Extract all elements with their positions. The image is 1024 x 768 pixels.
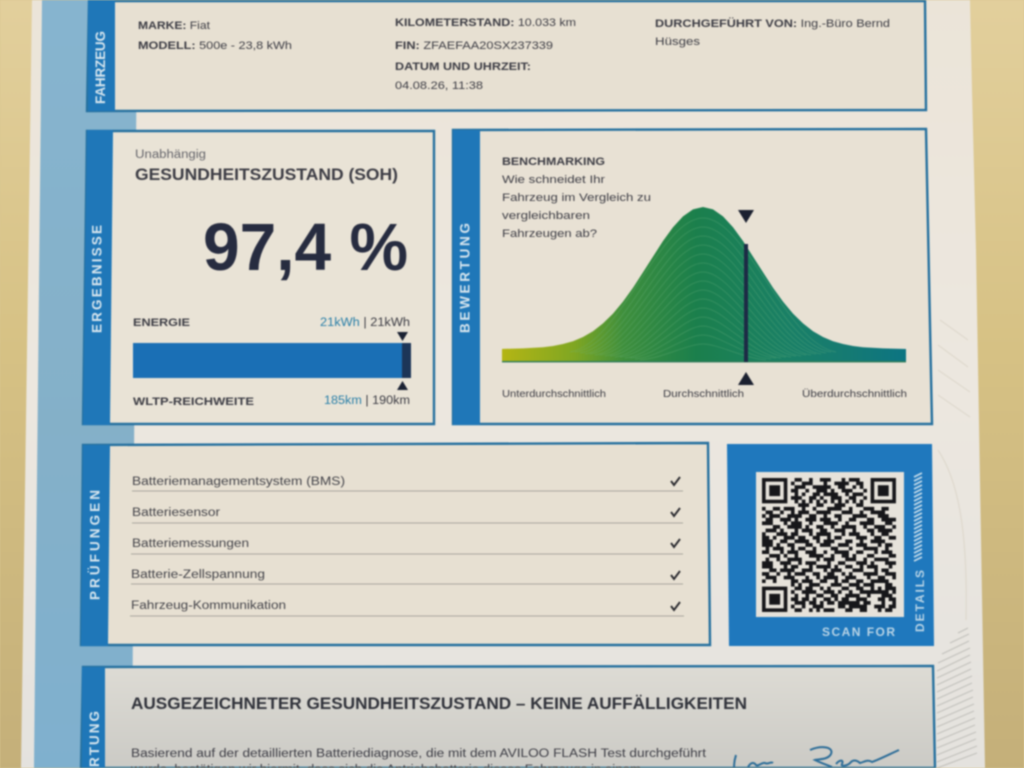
caption: details: DETAILS <box>913 570 927 632</box>
marker: range <box>397 381 408 390</box>
axis labels: Unterdurchschnittlich <box>502 388 606 400</box>
check: cell voltage <box>131 569 680 581</box>
summary body: Basierend auf der detaillierten Batteriediagnose, die mit dem AVILOO FLASH Test durchgeführt <box>131 748 707 760</box>
range values: 185km | 190km <box>324 395 410 407</box>
baseline <box>502 361 906 362</box>
check: sensor <box>132 507 680 519</box>
range label: WLTP-REICHWEITE <box>133 396 254 408</box>
panel: QR code <box>727 444 934 646</box>
signature <box>734 747 899 768</box>
energy label: ENERGIE <box>133 317 190 329</box>
check: communication <box>131 600 680 612</box>
tab: summary <box>82 667 105 768</box>
marker: bottom <box>738 372 754 385</box>
inspector: DURCHGEFÜHRT VON: Ing.-Büro Bernd <box>655 17 890 30</box>
axis labels <box>502 388 907 400</box>
benchmarking question: Wie schneidet Ihr <box>502 174 605 186</box>
benchmarking question <box>502 174 651 240</box>
check: sensor: Batteriesensor <box>132 507 220 519</box>
check: communication: Fahrzeug-Kommunikation <box>131 600 286 612</box>
inspector name: Hüsges <box>655 36 701 48</box>
benchmarking heading: BENCHMARKING <box>502 156 605 168</box>
benchmarking question: Fahrzeugen ab? <box>502 228 597 240</box>
hatch decoration <box>914 473 922 561</box>
QR background <box>756 472 904 617</box>
QR code <box>762 480 896 610</box>
axis labels: Überdurchschnittlich <box>802 388 907 400</box>
panel: Bewertung summary <box>81 666 935 768</box>
mileage: KILOMETERSTAND: 10.033 km <box>395 17 576 29</box>
summary heading: AUSGEZEICHNETER GESUNDHEITSZUSTAND – KEINE AUFFÄLLIGKEITEN <box>131 695 747 713</box>
tab: Ergebnisse <box>83 130 113 425</box>
check: measurements <box>132 538 680 550</box>
benchmarking question: Fahrzeug im Vergleich zu <box>502 192 651 204</box>
panel: Prüfungen <box>81 443 710 646</box>
subtitle: Unabhängig <box>135 149 206 161</box>
vehicle position line <box>744 244 748 362</box>
benchmarking question: vergleichbaren <box>502 210 590 222</box>
caption: scan for: SCAN FOR <box>822 625 895 639</box>
faint paper line pattern <box>938 320 970 620</box>
check: BMS: Batteriemanagementsystem (BMS) <box>132 476 345 488</box>
vehicle make: MARKE: Fiat <box>138 20 210 32</box>
marker: top <box>738 210 754 223</box>
heading: SOH: GESUNDHEITSZUSTAND (SOH) <box>135 166 398 184</box>
summary body <box>130 748 707 768</box>
check: BMS <box>132 476 680 488</box>
tab: Fahrzeug <box>88 0 115 111</box>
blue side strip <box>34 0 137 768</box>
SOH value: 97,4 % <box>203 210 408 285</box>
panel: Bewertung <box>453 129 932 425</box>
check: measurements: Batteriemessungen <box>132 538 249 550</box>
panel: Fahrzeug <box>87 0 926 111</box>
check: cell voltage: Batterie-Zellspannung <box>131 569 265 581</box>
tab label: summary: RTUNG <box>87 711 102 767</box>
date value: 04.08.26, 11:38 <box>395 80 483 92</box>
axis labels: Durchschnittlich <box>663 388 744 400</box>
tab: Prüfungen <box>81 445 110 646</box>
tab label: Bewertung: BEWERTUNG <box>458 223 472 333</box>
marker: energy <box>397 332 408 341</box>
corner hatching <box>937 628 977 768</box>
contour lines <box>570 218 836 360</box>
capacity bar <box>133 343 411 378</box>
vehicle model: MODELL: 500e - 23,8 kWh <box>138 40 292 52</box>
bell curve chart <box>502 207 906 362</box>
row separators <box>130 491 684 616</box>
date label: DATUM UND UHRZEIT: <box>395 61 531 73</box>
tab label: Ergebnisse: ERGEBNISSE <box>90 225 104 333</box>
tab label: Fahrzeug: FAHRZEUG <box>93 31 108 104</box>
panel: Ergebnisse <box>83 130 434 425</box>
tab: Bewertung <box>453 130 480 425</box>
tab label: Prüfungen: PRÜFUNGEN <box>88 490 102 600</box>
VIN: FIN: ZFAEFAA20SX237339 <box>395 40 553 52</box>
energy values: 21kWh | 21kWh <box>320 317 410 329</box>
